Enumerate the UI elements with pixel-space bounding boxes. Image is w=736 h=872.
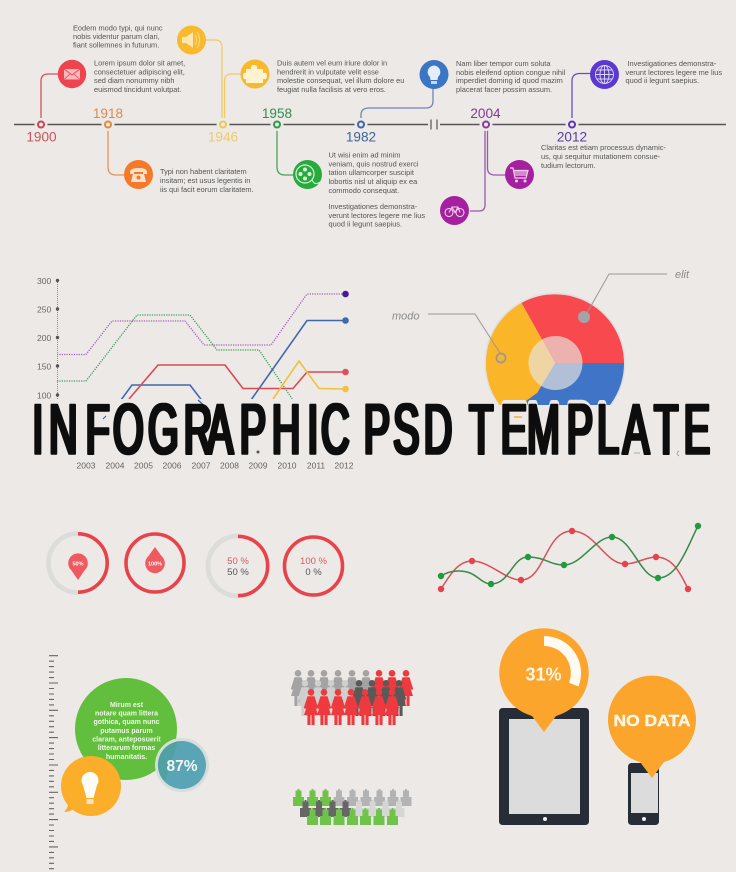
donut: 50 / 50: 50 % [227,567,249,578]
y axis labels: 200 [37,333,51,343]
year labels [26,106,587,144]
chart x axis labels: 2008 [220,460,239,470]
bubble: green text: gothica, quam nunc [93,719,160,726]
year labels: 1958 [262,106,292,121]
series: yellow [273,361,345,399]
series: purple dotted [57,294,345,354]
title: INFOGRAPHIC PSD TEMPLATE [32,391,710,470]
chart x axis labels: 2012 [335,460,354,470]
bubble: green text: Mirum est [110,702,144,709]
y axis labels: 150 [37,362,51,372]
timeline nodes [34,118,578,131]
icon: phone [124,160,153,189]
text: Duis: feugiat nulla facilisis at vero eros. [277,85,386,94]
tablet [499,708,589,825]
connector lines [41,40,592,211]
ruler [49,656,58,869]
bubble: green text: claram, anteposuerit [92,736,161,744]
chart x axis labels: 2004 [106,460,125,470]
donut: 50% drop: 50% [72,562,84,568]
text: Nam liber: imperdiet doming id quod mazim [456,76,563,85]
bubble: 31% [499,628,589,732]
bubble: NO DATA: NO DATA [614,713,690,730]
text: Eodem: nobis videntur parum clari, [73,32,160,41]
text: Eodem: fiant sollemnes in futurum. [73,40,159,50]
text: Claritas: us, qui sequitur mutationem consue- [541,152,661,161]
bubble: green text: notare quam littera [95,710,158,718]
bubble: teal 87% [155,738,209,792]
chart x axis labels: 2011 [307,460,325,470]
text: Nam liber: Nam liber tempor cum soluta [456,59,551,68]
chart x axis labels: 2006 [163,460,182,470]
donut: 100 / 0: 0 % [305,567,322,578]
text: Duis: Duis autem vel eum iriure dolor in [277,58,387,68]
bubble: NO DATA [608,676,696,778]
year labels: 2004 [470,106,501,121]
icon: globe [590,60,619,89]
text: Duis: hendrerit in vulputate velit esse [277,68,379,76]
donut: 50 / 50: 50 % [227,556,249,567]
icon: film reel [293,160,322,189]
text: Lorem: sed diam nonummy nibh [94,76,175,85]
timeline [14,24,726,228]
bubble: orange bulb [61,756,121,816]
series: blue [121,320,345,411]
series: green dotted [57,315,293,400]
chart x axis labels: 2009 [249,460,268,470]
phone [628,763,659,825]
y axis labels: 300 [37,276,51,286]
line chart [37,276,349,411]
donut: 50 / 50 [208,536,268,596]
text: Investigationes lower: Investigationes demonstra- [328,202,418,211]
bubble: green text: humanitatis. [106,754,147,761]
pictogram: buildings [293,789,412,825]
text: Nam liber: nobis eleifend option congue nihil [456,68,566,77]
icon: mail [58,60,86,88]
donut: 100 / 0: 100 % [300,556,328,567]
text: Investigationes lower: verunt lectores legere me lius [328,211,425,220]
donut: 100% drop: 100% [148,562,162,568]
chart x axis labels: 2007 [192,460,211,470]
text: Typi: iis qui facit eorum claritatem. [160,185,254,194]
icon: light bulb [420,60,448,89]
icon: cart [505,160,534,189]
title: INFOGRAPHIC PSD TEMPLATE [32,390,710,469]
bubble: green text: litterarum formas [98,745,155,752]
y axis labels: 250 [37,304,51,314]
text: Duis: molestie consequat, vel illum dolore eu [277,76,404,85]
callout: elit [578,269,690,323]
bubble: teal 87%: 87% [166,758,198,775]
chart x axis labels: 2005 [134,460,153,470]
y axis labels: 100 [37,390,51,400]
icon: puzzle [240,60,270,88]
year labels: 1900 [26,130,57,144]
text: Lorem: Lorem ipsum dolor sit amet, [94,58,185,68]
bubble: green text [75,678,177,780]
icon: bicycle [440,196,469,225]
text: Nam liber: placerat facer possim assum. [456,85,552,94]
callout: elit: elit [675,269,690,281]
bubble: green text: putamus parum [100,728,153,735]
chart x axis labels: 2003 [77,460,96,470]
spline chart [438,523,701,592]
y axis labels [37,276,51,400]
text: Ut wisi: Ut wisi enim ad minim [328,150,400,160]
callout: modo: modo [392,310,420,322]
text: Ut wisi: veniam, quis nostrud exerci [328,160,419,168]
year labels: 2012 [557,130,587,144]
year labels: 1982 [346,130,376,144]
text: Lorem: consectetuer adipiscing elit, [94,68,185,76]
text: Claritas: Claritas est etiam processus dynamic- [541,143,666,152]
text: Claritas: tudium lectorum. [541,161,596,170]
icon: speaker [177,26,206,54]
donut: 100 / 0 [284,537,342,595]
text: Ut wisi: tation ullamcorper suscipit [328,168,414,177]
text: Ut wisi: lobortis nisl ut aliquip ex ea [328,177,418,186]
bubble: 31%: 31% [525,664,562,684]
pie chart [392,269,690,434]
chart x axis labels [77,460,354,470]
text: Typi: Typi non habent claritatem [160,167,247,176]
chart x axis labels: 2010 [278,460,297,470]
text: Investigationes upper: verunt lectores legere me lius [626,68,722,77]
pictogram: people [291,670,413,725]
text: Investigationes upper: quod ii legunt saepius. [626,76,699,85]
text: Investigationes upper: Investigationes demonstra- [628,59,717,68]
text: Lorem: euismod tincidunt volutpat. [94,85,182,94]
series: red [129,365,345,399]
text: Typi: insitam; est usus legentis in [160,176,250,185]
text: Investigationes lower: quod ii legunt saepius. [328,220,402,228]
year labels: 1946 [208,130,238,144]
text: Eodem: Eodem modo typi, qui nunc [73,24,163,32]
donut: 50% drop [48,534,107,592]
text: Ut wisi: commodo consequat. [328,186,399,195]
year labels: 1918 [93,106,123,121]
callout: modo [392,310,506,362]
donut: 100% drop [126,534,184,592]
